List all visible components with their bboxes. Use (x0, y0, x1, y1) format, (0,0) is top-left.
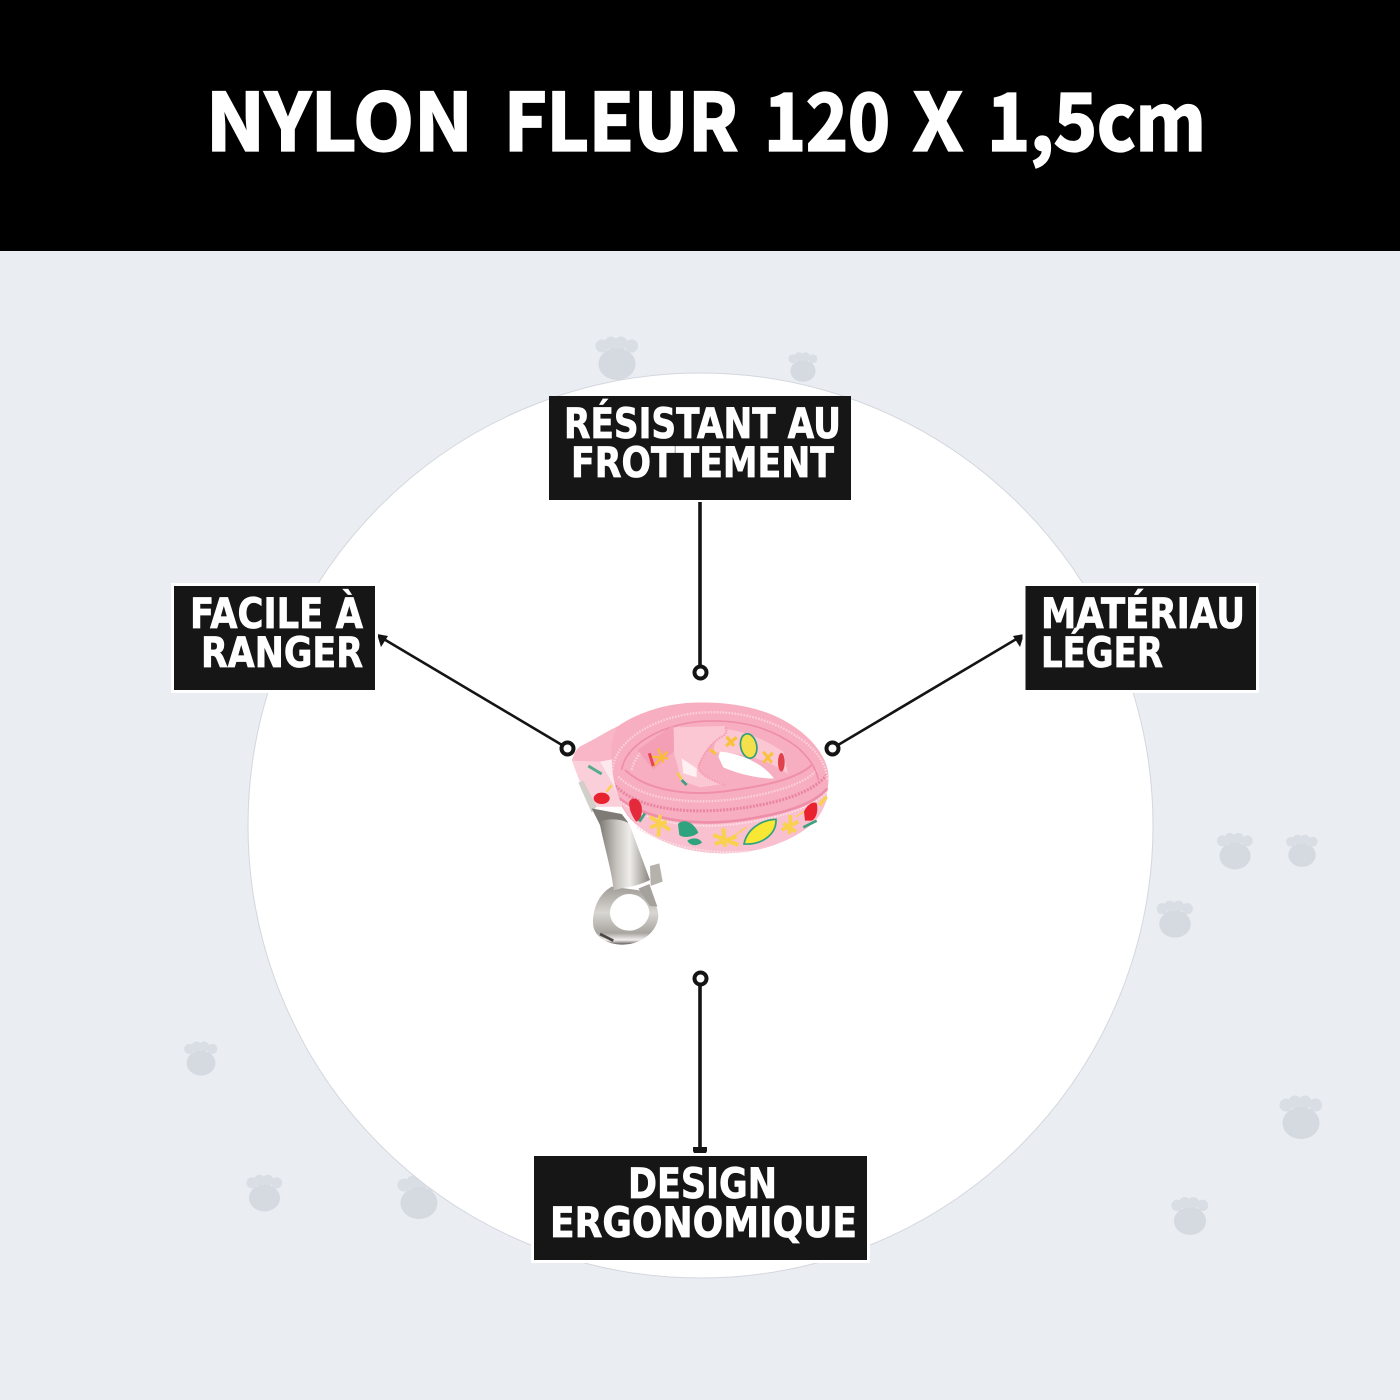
label: résistant au frottement (549, 396, 851, 500)
label: matériau léger: MATÉRIAU (1041, 588, 1245, 638)
title: FLEUR (504, 58, 738, 174)
arrow: résistant au frottement (694, 502, 706, 678)
inner loop (674, 726, 727, 787)
label: facile à ranger: RANGER (201, 628, 363, 677)
left tab (572, 727, 617, 762)
label: matériau léger (1024, 584, 1258, 692)
title: 120 (764, 58, 890, 174)
arrow: facile à ranger (377, 634, 574, 754)
clasp ring (593, 887, 658, 945)
label: facile à ranger (172, 584, 376, 692)
label: résistant au frottement: FROTTEMENT (571, 438, 834, 487)
arrow: matériau léger (826, 634, 1024, 754)
label: design ergonomique: ERGONOMIQUE (550, 1198, 857, 1247)
strap motifs back (652, 748, 668, 766)
label: facile à ranger: FACILE À (190, 588, 363, 638)
label: résistant au frottement: RÉSISTANT AU (564, 398, 841, 448)
clasp shaft (599, 819, 650, 891)
clasp plate (578, 781, 597, 813)
title: 1,5cm (987, 58, 1206, 174)
handle opening (718, 752, 774, 779)
clasp trigger (650, 863, 663, 886)
label: design ergonomique: DESIGN (628, 1159, 777, 1208)
coil ridges (613, 712, 827, 852)
white circle panel (248, 373, 1153, 1278)
front band face (619, 788, 827, 853)
title: X (913, 58, 963, 174)
product photo: pink leash (572, 702, 828, 945)
header band (0, 0, 1400, 251)
arrow: design ergonomique (693, 972, 707, 1154)
title (206, 58, 1206, 174)
lemon strap (713, 729, 788, 774)
leash coil base (572, 702, 828, 853)
label: matériau léger: LÉGER (1041, 627, 1163, 677)
paw prints (184, 336, 1322, 1235)
front motifs (629, 799, 642, 822)
title: NYLON (206, 58, 473, 174)
label: design ergonomique (532, 1154, 868, 1262)
